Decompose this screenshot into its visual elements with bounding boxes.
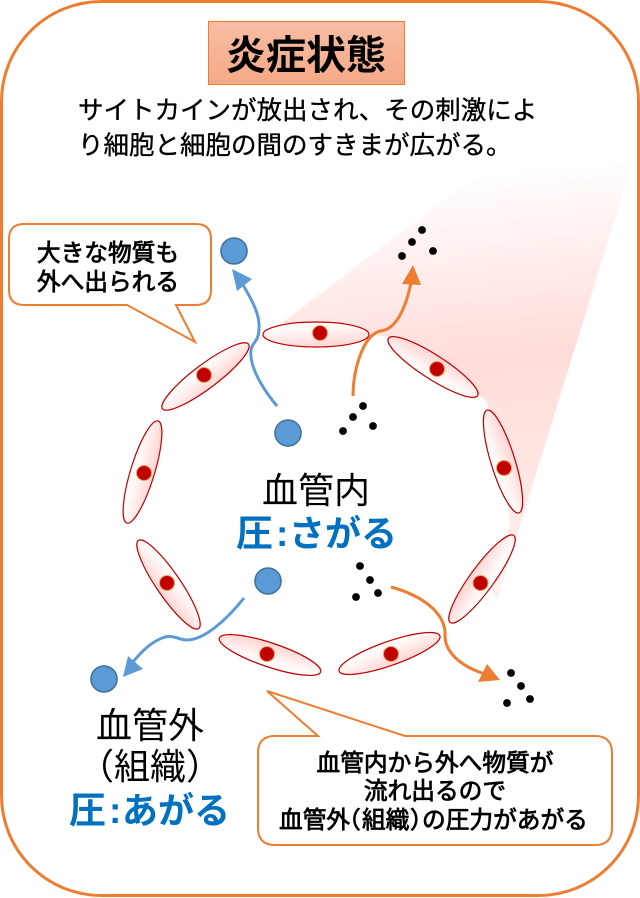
label: outside vessel: 圧 — [69, 790, 106, 831]
callout: pressure rises — [258, 691, 612, 845]
callout: pressure rises: 組織 — [362, 807, 409, 834]
cell: lower right — [441, 528, 523, 630]
description text: り細胞と細胞の間のすきまが広がる。 — [78, 132, 512, 160]
callout: pressure rises: の圧力があがる — [422, 807, 588, 834]
callout: pressure rises: （ — [337, 808, 361, 834]
label: inside vessel: さがる — [289, 513, 397, 554]
arrow: blue upward through gap — [232, 269, 277, 406]
callout: pressure rises: 血管内から外へ物質が — [317, 750, 554, 777]
cell: bottom left — [216, 627, 324, 683]
cell: left — [115, 417, 170, 527]
label: outside vessel: あがる — [122, 790, 230, 831]
label: inside vessel — [236, 470, 397, 554]
large particles — [91, 238, 301, 692]
magnification wedge — [253, 163, 632, 600]
label: inside vessel: : — [276, 513, 288, 554]
arrow: orange downward to tissue — [391, 587, 500, 682]
label: outside vessel — [69, 705, 230, 831]
small particles: inside upper — [339, 402, 377, 435]
cell: lower left — [128, 534, 209, 635]
label: outside vessel: （組織） — [78, 746, 222, 787]
title box — [208, 22, 404, 84]
cell: upper right — [382, 328, 484, 406]
cell: right — [476, 407, 530, 516]
arrow: orange upward through gap — [353, 265, 421, 396]
callout: large substances — [9, 224, 211, 342]
callout: pressure rises: 血管外 — [279, 807, 350, 834]
cell: upper left — [155, 335, 256, 418]
label: inside vessel: 血管内 — [262, 470, 370, 511]
label: outside vessel: 血管外 — [96, 705, 204, 746]
label: outside vessel: : — [109, 790, 121, 831]
callout: large substances: 大きな物質も — [37, 240, 179, 267]
small particles: outside top — [398, 226, 437, 260]
arrow: blue downward to tissue — [123, 598, 244, 677]
description text — [78, 97, 537, 160]
cell: bottom right — [335, 625, 444, 682]
callout: pressure rises: 流れ出るので — [364, 778, 506, 805]
title box: 炎症状態 — [226, 34, 386, 78]
label: inside vessel: 圧 — [236, 513, 273, 554]
small particles: inside lower — [352, 562, 382, 601]
vessel wall cells — [115, 322, 530, 683]
callout: pressure rises: ） — [410, 808, 434, 834]
callout: large substances: 外へ出られる — [37, 269, 179, 296]
description text: サイトカインが放出され、その刺激によ — [78, 97, 537, 125]
cell: top — [263, 322, 369, 347]
small particles: outside bottom — [503, 669, 534, 707]
